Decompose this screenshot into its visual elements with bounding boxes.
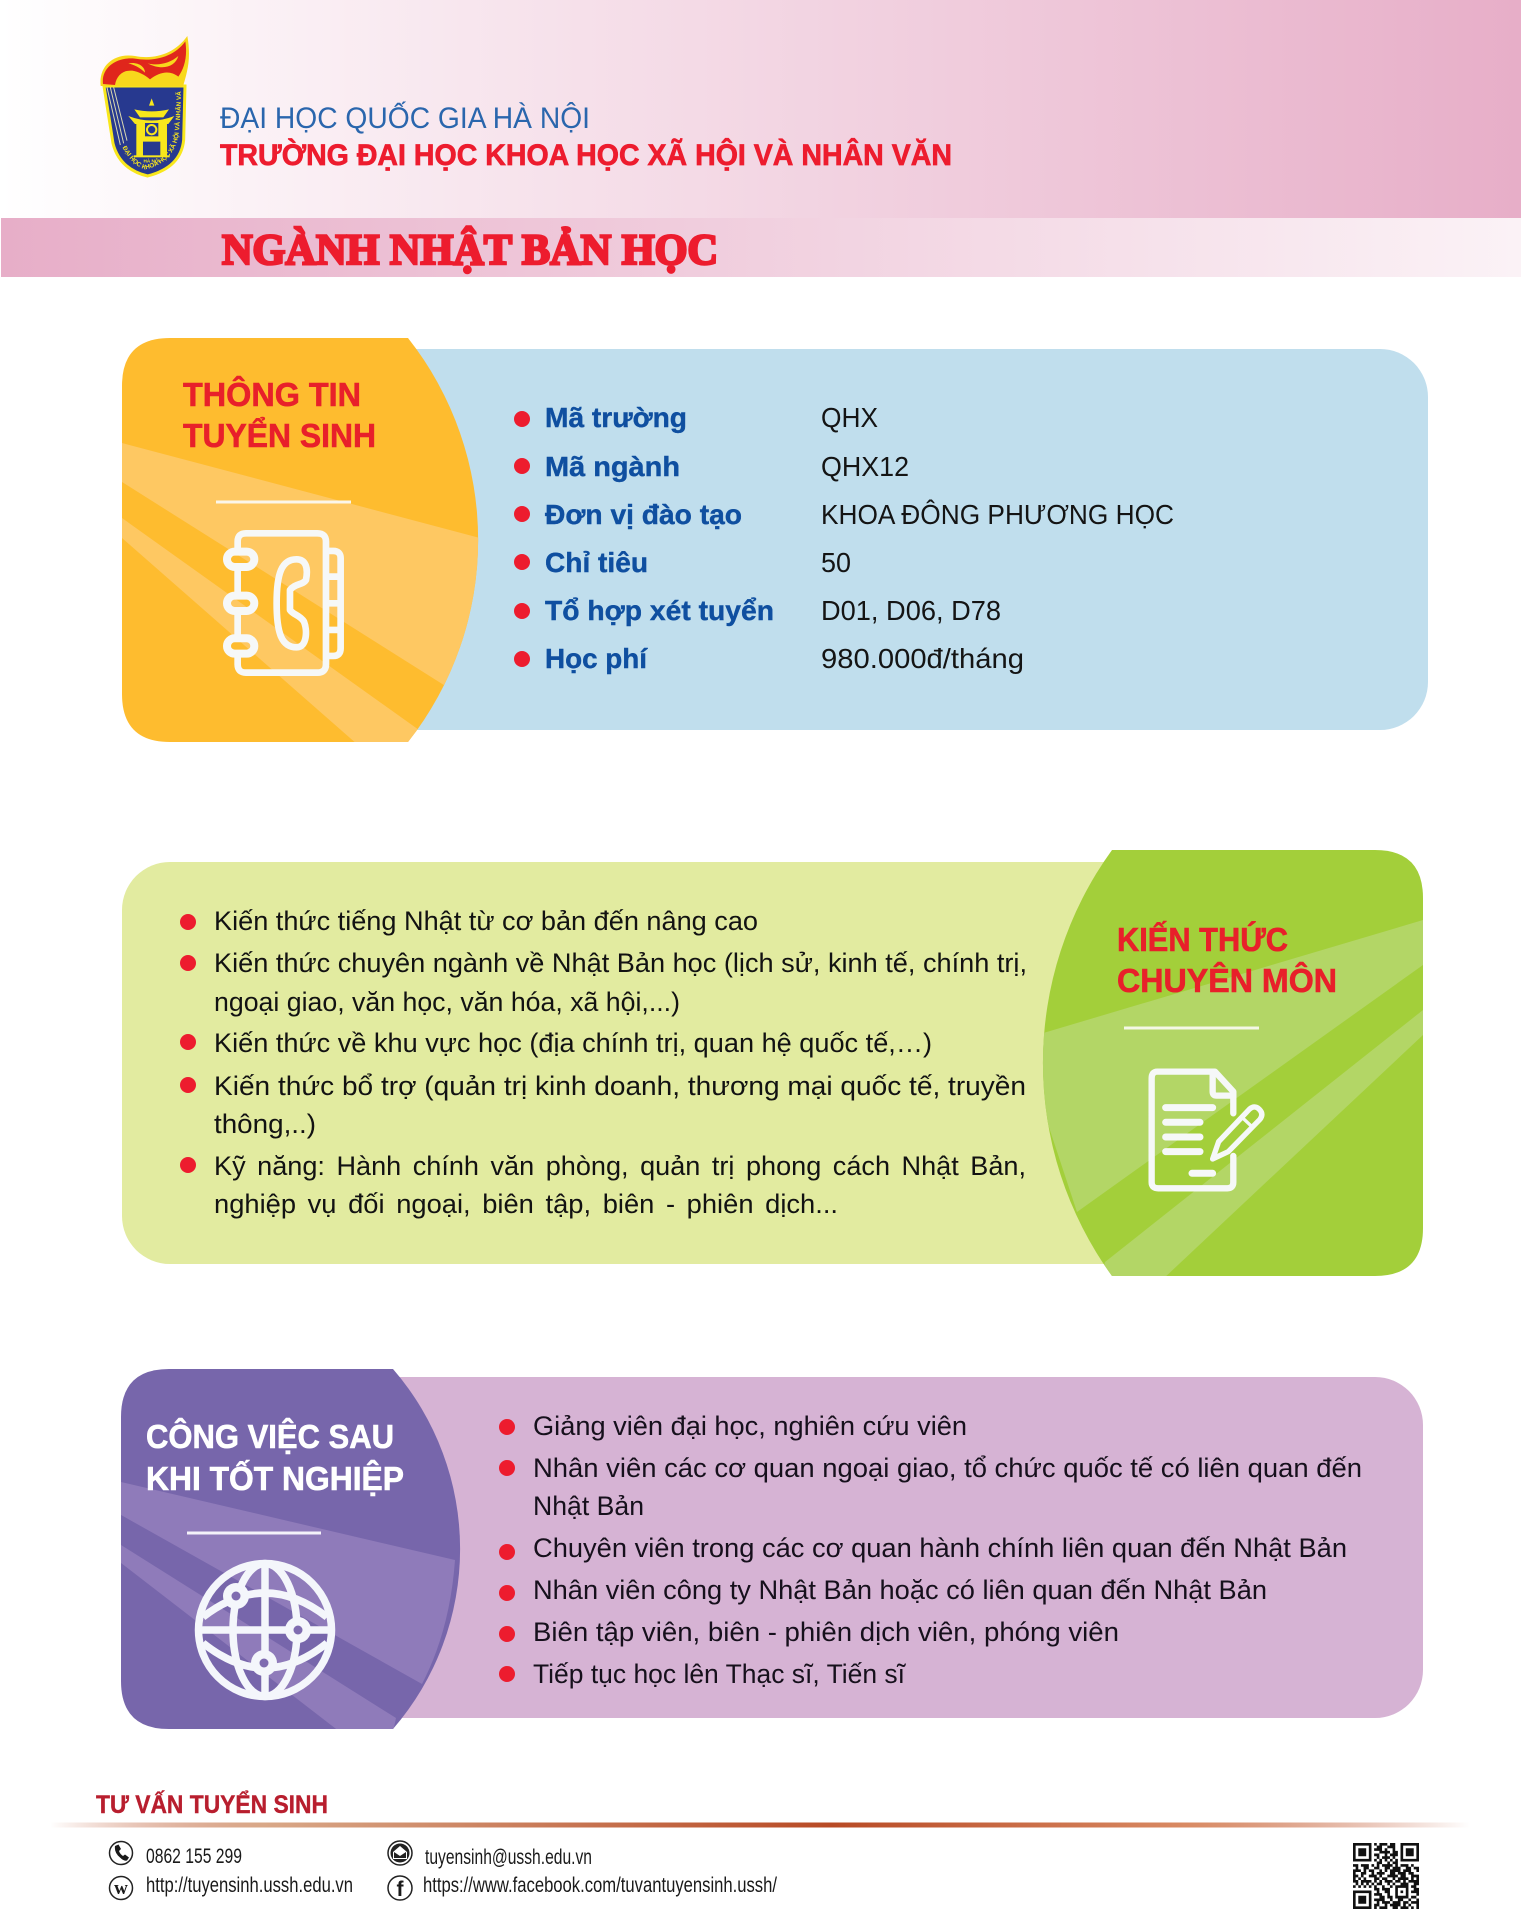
knowledge list bbox=[180, 906, 1027, 1219]
info rows bbox=[514, 402, 1174, 674]
contact: facebook bbox=[388, 1874, 777, 1901]
bullets bbox=[499, 1419, 515, 1682]
list text: Biên tập viên, biên - phiên dịch viên, phóng viên bbox=[533, 1617, 1119, 1647]
panel: công việc sau khi tốt nghiệp bbox=[121, 1369, 1423, 1732]
contact: website bbox=[110, 1874, 353, 1900]
panel background: blue bbox=[300, 349, 1428, 730]
panel: kiến thức chuyên môn bbox=[122, 850, 1424, 1280]
list text: thông,..) bbox=[214, 1109, 316, 1139]
heading: CHUYÊN MÔN bbox=[1117, 961, 1337, 999]
panel tab: green bbox=[1040, 850, 1424, 1280]
header text: university: ĐẠI HỌC QUỐC GIA HÀ NỘI bbox=[220, 101, 590, 135]
row: đơn vị đào tạo: Đơn vị đào tạo bbox=[545, 499, 742, 530]
panel tab: purple bbox=[121, 1369, 463, 1732]
list text: Nhân viên công ty Nhật Bản hoặc có liên quan đến Nhật Bản bbox=[533, 1575, 1267, 1605]
title: NGÀNH NHẬT BẢN HỌC bbox=[222, 227, 718, 274]
heading bbox=[146, 1417, 404, 1497]
heading bbox=[183, 375, 376, 454]
jobs list bbox=[499, 1411, 1362, 1689]
heading: THÔNG TIN bbox=[183, 375, 361, 413]
contact: website: w bbox=[114, 1878, 128, 1899]
logo: shield bbox=[104, 86, 185, 176]
row: chỉ tiêu: 50 bbox=[821, 547, 851, 578]
row: mã ngành: Mã ngành bbox=[545, 451, 680, 482]
row: mã trường: QHX bbox=[821, 402, 878, 433]
logo bbox=[100, 36, 189, 178]
heading: CÔNG VIỆC SAU bbox=[146, 1417, 394, 1455]
contact: email bbox=[388, 1841, 592, 1869]
row: chỉ tiêu: Chỉ tiêu bbox=[545, 547, 648, 578]
row: đơn vị đào tạo bbox=[514, 499, 1174, 530]
list text bbox=[214, 906, 1027, 1219]
row: học phí: Học phí bbox=[545, 643, 648, 674]
footer heading: TƯ VẤN TUYỂN SINH bbox=[96, 1790, 328, 1819]
list text: ngoại giao, văn học, văn hóa, xã hội,...) bbox=[214, 987, 680, 1017]
row: tổ hợp xét tuyển bbox=[514, 595, 1001, 626]
panel tab: orange bbox=[122, 338, 482, 745]
list text: nghiệp vụ đối ngoại, biên tập, biên - phiên dịch... bbox=[214, 1189, 838, 1219]
row: tổ hợp xét tuyển: Tổ hợp xét tuyển bbox=[545, 595, 774, 626]
row: học phí bbox=[514, 643, 1024, 674]
contact: phone bbox=[110, 1842, 242, 1868]
logo: place name: HÀ NỘI bbox=[144, 157, 160, 164]
icon: address book bbox=[227, 533, 341, 673]
contact: facebook: https://www.facebook.com/tuvantuyensinh.ussh/ bbox=[423, 1874, 777, 1897]
contact: facebook: f bbox=[396, 1878, 404, 1901]
logo: pagoda bbox=[128, 98, 174, 157]
list text: Kiến thức về khu vực học (địa chính trị, quan hệ quốc tế,…) bbox=[214, 1028, 932, 1058]
list text: Kiến thức bổ trợ (quản trị kinh doanh, thương mại quốc tế, truyền bbox=[214, 1071, 1026, 1101]
header text: school: TRƯỜNG ĐẠI HỌC KHOA HỌC XÃ HỘI VÀ NHÂN VĂN bbox=[220, 138, 952, 172]
icon: QR code bbox=[1353, 1844, 1419, 1908]
row: mã trường: Mã trường bbox=[545, 402, 687, 433]
list text: Giảng viên đại học, nghiên cứu viên bbox=[533, 1411, 967, 1441]
list text: Nhật Bản bbox=[533, 1491, 644, 1521]
row: mã ngành: QHX12 bbox=[821, 451, 909, 482]
list text: Kiến thức tiếng Nhật từ cơ bản đến nâng cao bbox=[214, 906, 758, 936]
icon: globe bbox=[198, 1563, 332, 1697]
heading: TUYỂN SINH bbox=[183, 417, 376, 454]
list text: Chuyên viên trong các cơ quan hành chính liên quan đến Nhật Bản bbox=[533, 1533, 1347, 1563]
contact: website: http://tuyensinh.ussh.edu.vn bbox=[146, 1874, 353, 1897]
logo: flame bbox=[100, 36, 189, 87]
heading: KHI TỐT NGHIỆP bbox=[146, 1459, 404, 1497]
heading bbox=[1117, 921, 1337, 999]
title band bbox=[1, 218, 1521, 277]
row: chỉ tiêu bbox=[514, 547, 851, 578]
panel background: light green bbox=[122, 862, 1302, 1264]
list text: Kỹ năng: Hành chính văn phòng, quản trị phong cách Nhật Bản, bbox=[214, 1151, 1026, 1181]
row: đơn vị đào tạo: KHOA ĐÔNG PHƯƠNG HỌC bbox=[821, 499, 1174, 530]
contact: phone: 0862 155 299 bbox=[146, 1845, 242, 1868]
list text: Kiến thức chuyên ngành về Nhật Bản học (lịch sử, kinh tế, chính trị, bbox=[214, 948, 1027, 978]
heading: KIẾN THỨC bbox=[1117, 921, 1288, 958]
list text bbox=[533, 1411, 1362, 1689]
contact: email: tuyensinh@ussh.edu.vn bbox=[425, 1846, 592, 1869]
header background bbox=[0, 0, 1521, 218]
panel: thông tin tuyển sinh bbox=[122, 338, 1428, 745]
icon: document and pen bbox=[1152, 1072, 1262, 1188]
row: mã ngành bbox=[514, 451, 909, 482]
row: học phí: 980.000đ/tháng bbox=[821, 643, 1024, 674]
panel background: pink bbox=[300, 1377, 1423, 1718]
list text: Tiếp tục học lên Thạc sĩ, Tiến sĩ bbox=[533, 1659, 906, 1689]
list text: Nhân viên các cơ quan ngoại giao, tổ chức quốc tế có liên quan đến bbox=[533, 1453, 1362, 1483]
row: mã trường bbox=[514, 402, 878, 433]
bullets bbox=[180, 914, 196, 1173]
logo: ring text: ĐẠI HỌC KHOA HỌC XÃ HỘI VÀ NHÂN VĂN bbox=[122, 92, 181, 170]
row: tổ hợp xét tuyển: D01, D06, D78 bbox=[821, 595, 1001, 626]
logo: stripes bbox=[107, 87, 127, 145]
